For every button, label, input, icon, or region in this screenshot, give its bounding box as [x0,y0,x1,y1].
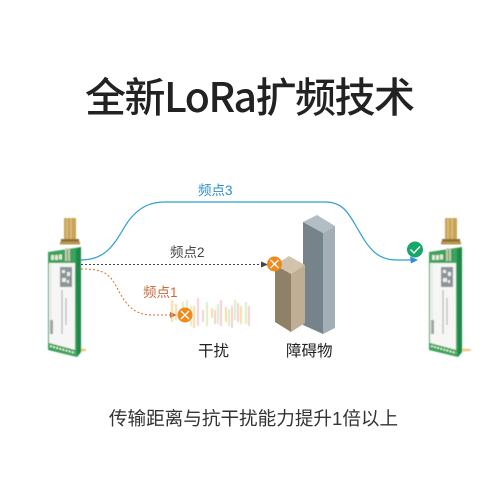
path: frequency 2 dotted line [81,262,268,268]
label: obstacle: 障碍物 [286,342,333,360]
path: frequency 3 blue line [81,202,418,264]
label: interference: 干扰 [198,342,229,360]
label: frequency 3: 频点3 [198,183,233,198]
caption: 传输距离与抗干扰能力提升1倍以上 [109,408,398,429]
icon: green check [407,242,423,258]
icon: tan short building [275,256,305,332]
module: right LoRa module [429,218,471,357]
title: 全新LoRa扩频技术 [85,64,415,124]
path: frequency 1 dotted line [81,269,177,318]
module: left LoRa module [48,218,86,357]
icon: orange cross on obstacle [267,256,282,272]
icon: orange cross on interference [178,308,192,322]
chart: interference spectrum bars [172,298,249,328]
icon: gray tall building [303,215,335,334]
label: frequency 2: 频点2 [170,245,205,260]
label: frequency 1: 频点1 [143,285,178,300]
